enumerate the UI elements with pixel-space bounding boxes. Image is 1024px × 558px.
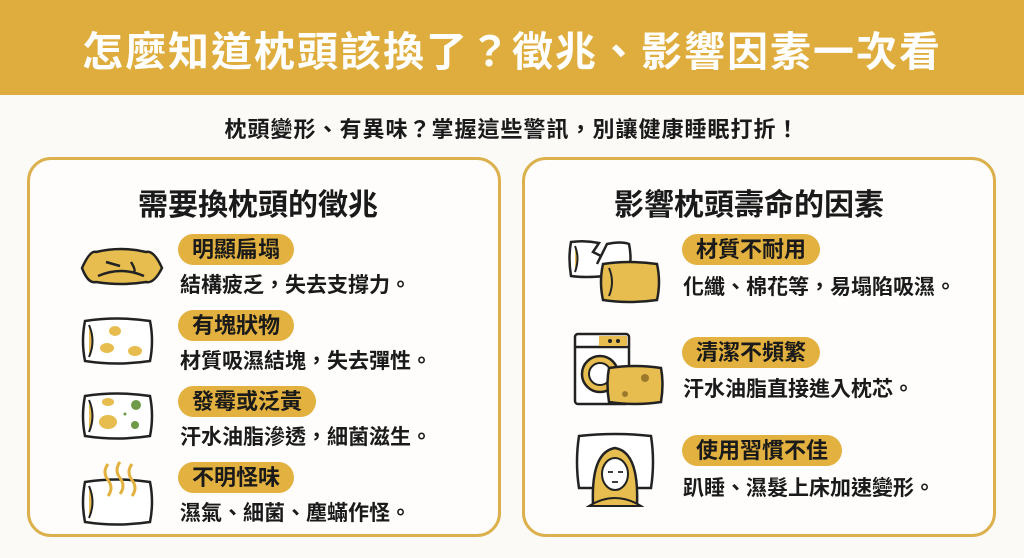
panel: factors	[522, 157, 996, 537]
pill 1: 明顯扁塌	[192, 237, 280, 262]
header band	[0, 0, 1024, 95]
pill 4: 不明怪味	[192, 465, 280, 490]
icon: washer + pillow	[574, 332, 664, 406]
icon: sleeping person	[576, 432, 654, 507]
pill 3: 發霉或泛黃	[192, 389, 302, 414]
pill 3	[178, 386, 316, 417]
desc 4: 濕氣、細菌、塵蟎作怪。	[180, 502, 411, 525]
heading: factors: 影響枕頭壽命的因素	[614, 189, 884, 222]
pill 4	[178, 462, 294, 493]
icon: moldy pillow	[82, 392, 154, 440]
icon: broken pillow	[568, 240, 660, 304]
desc 3: 汗水油脂滲透，細菌滋生。	[180, 426, 432, 449]
pill 7	[682, 435, 842, 466]
pill 6: 清潔不頻繁	[696, 340, 806, 365]
title: 怎麼知道枕頭該換了？徵兆、影響因素一次看	[82, 29, 942, 75]
pill 2	[178, 310, 294, 341]
desc 1: 結構疲乏，失去支撐力。	[180, 274, 411, 297]
pill 6	[682, 337, 820, 368]
pill 1	[178, 234, 294, 265]
pill 7: 使用習慣不佳	[696, 438, 828, 463]
pill 5: 材質不耐用	[696, 237, 806, 262]
icon: flat pillow	[80, 248, 164, 286]
desc 5: 化纖、棉花等，易塌陷吸濕。	[683, 276, 956, 299]
icon: smelly pillow	[82, 461, 154, 526]
panel: signs	[27, 157, 501, 537]
desc 2: 材質吸濕結塊，失去彈性。	[180, 350, 432, 373]
icon: lumpy pillow	[82, 317, 154, 365]
subtitle: 枕頭變形、有異味？掌握這些警訊，別讓健康睡眠打折！	[224, 117, 800, 142]
desc 7: 趴睡、濕髮上床加速變形。	[683, 477, 935, 500]
desc 6: 汗水油脂直接進入枕芯。	[683, 378, 914, 401]
heading: signs: 需要換枕頭的徵兆	[138, 189, 378, 222]
pill 2: 有塊狀物	[192, 313, 280, 338]
pill 5	[682, 234, 820, 265]
